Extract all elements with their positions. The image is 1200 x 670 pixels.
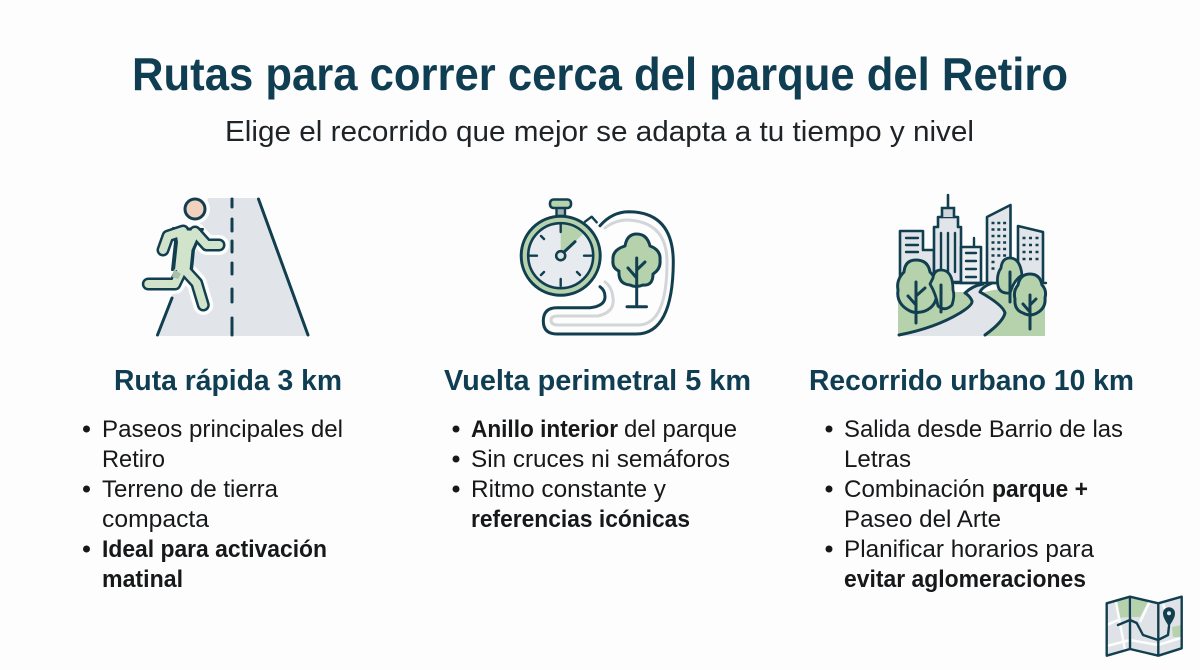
map route [1118,620,1169,640]
stopwatch hand [563,242,575,253]
loop track outer line [543,212,673,334]
tree trunk [627,258,646,307]
list: ruta rapida: compacta [102,506,209,533]
heading: recorrido urbano: Recorrido urbano 10 km [809,365,1134,397]
stopwatch crown [556,207,565,216]
list: ruta rapida: Terreno de tierra [102,476,278,503]
list: vuelta perimetral: Sin cruces ni semáforos [471,446,730,473]
icon: runner on road [148,194,308,336]
list: recorrido urbano: Combinación [844,476,985,503]
tree 3 [997,258,1022,293]
runner head [185,199,205,219]
road left edge [158,298,172,335]
park ground [898,285,1045,336]
list: recorrido urbano [826,416,1123,593]
stopwatch hub [556,251,565,260]
tall tower [934,217,961,282]
park tree [613,234,660,286]
list: vuelta perimetral: Anillo interior [471,416,618,443]
loop track inner line [551,220,667,325]
map outline [1107,597,1182,656]
list: recorrido urbano: Paseo del Arte [844,506,1001,533]
tree 2 [930,270,954,309]
map pin [1163,607,1175,627]
right tower [1018,226,1043,282]
map streets [1107,601,1181,650]
stopwatch case [521,216,600,295]
list: recorrido urbano: evitar aglomeraciones [844,566,1086,593]
map sheet [1107,597,1182,656]
list: ruta rapida [83,416,343,593]
road right edge [258,199,308,335]
list: vuelta perimetral: referencias icónicas [471,506,690,533]
map park areas [1115,598,1181,637]
runner body fill [148,231,219,305]
stopwatch elapsed wedge [561,224,583,256]
stopwatch ticks [530,225,591,286]
list: ruta rapida: matinal [102,566,183,593]
list: vuelta perimetral [452,416,737,533]
slanted tower [987,205,1010,283]
list: ruta rapida: Paseos principales del [102,416,343,443]
icon: city and park [898,195,1046,336]
tree 4 [1014,274,1046,315]
tree 1 [898,260,937,312]
runner halo [148,209,219,305]
list: ruta rapida: Retiro [102,446,165,473]
list: recorrido urbano: parque + [992,476,1088,503]
left building [900,231,934,280]
list: ruta rapida: Ideal para activación [102,536,327,563]
icon: folded map [1107,597,1182,656]
road surface [157,198,308,336]
list: vuelta perimetral: del parque [624,416,737,443]
list: vuelta perimetral: Ritmo constante y [471,476,667,503]
winding path [898,283,1005,336]
stopwatch side button [585,217,597,222]
heading: vuelta perimetral: Vuelta perimetral 5 km [444,365,751,397]
icon: stopwatch and park loop [521,200,673,334]
runner body outline [148,231,219,305]
title: Rutas para correr cerca del parque del Retiro [132,48,1068,100]
low building [961,247,981,283]
subtitle: Elige el recorrido que mejor se adapta a tu tiempo y nivel [225,116,974,148]
heading: ruta rapida: Ruta rápida 3 km [114,365,342,397]
list: recorrido urbano: Planificar horarios para [844,536,1094,563]
stopwatch face [528,223,593,288]
road centre dashes [230,199,234,335]
list: recorrido urbano: Letras [844,446,911,473]
list: recorrido urbano: Salida desde Barrio de las [844,416,1123,443]
runner hip shadow [172,269,181,279]
